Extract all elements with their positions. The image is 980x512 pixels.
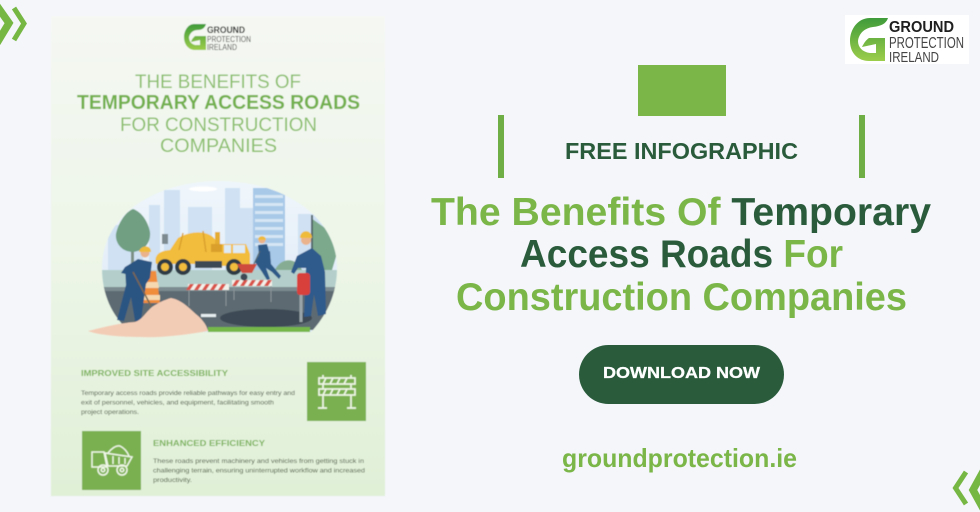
main headline [431, 191, 931, 319]
body text [81, 390, 295, 416]
asphalt patch [220, 309, 312, 327]
button: download now: DOWNLOAD NOW [603, 365, 760, 382]
logo: Ground Protection Ireland: GROUND [889, 19, 954, 36]
heading: ENHANCED EFFICIENCY [153, 438, 265, 448]
body text: exit of personnel, vehicles, and equipment, facilitating smooth [81, 400, 274, 406]
panel: infographic poster preview [51, 16, 385, 496]
poster title: COMPANIES [160, 135, 277, 157]
shovel worker [117, 246, 158, 321]
poster title: TEMPORARY ACCESS ROADS [77, 92, 360, 114]
body text: project operations. [81, 409, 139, 416]
heading: IMPROVED SITE ACCESSIBILITY [81, 368, 228, 378]
lane mark [201, 314, 216, 317]
poster title: THE BENEFITS OF [135, 71, 301, 93]
barriers [186, 280, 272, 306]
label: free infographic: FREE INFOGRAPHIC [565, 138, 798, 164]
jackhammer worker [291, 231, 326, 322]
poster logo: PROTECTION [207, 34, 251, 44]
decorative green block [638, 65, 726, 116]
poster logo [184, 24, 251, 52]
icon: dump truck [82, 431, 141, 490]
label: free infographic [498, 115, 865, 178]
body text: challenging terrain, ensuring uninterrupted workflow and increased [153, 468, 365, 474]
poster title [77, 71, 360, 157]
poster title: FOR CONSTRUCTION [120, 114, 317, 136]
sand pile [88, 298, 208, 337]
poster background [51, 16, 385, 496]
wheelbarrow worker [237, 236, 281, 280]
body text: These roads prevent machinery and vehicles from getting stuck in [153, 458, 364, 465]
sidewalk [100, 270, 340, 288]
poster logo: IRELAND [207, 42, 237, 52]
poster logo: GROUND [207, 25, 245, 35]
trees [130, 251, 134, 264]
logo: Ground Protection Ireland: IRELAND [889, 50, 939, 66]
button: download now [579, 345, 784, 404]
traffic cone [139, 271, 160, 303]
icon: top-left chevrons [0, 6, 24, 43]
grass strip [208, 327, 310, 333]
concrete mixer truck [156, 231, 250, 275]
main headline: Construction Companies [456, 276, 907, 319]
website url: groundprotection.ie [562, 443, 797, 473]
illustration: road construction scene [88, 180, 340, 337]
icon: bottom-right chevrons [956, 470, 980, 510]
buildings [108, 188, 330, 270]
cloud [189, 186, 217, 192]
section: improved site accessibility [81, 362, 366, 421]
body text: Temporary access roads provide reliable pathways for easy entry and [81, 390, 295, 397]
body text: productivity. [153, 477, 192, 484]
section: enhanced efficiency [82, 431, 365, 490]
main headline: The Benefits Of Temporary [431, 191, 931, 234]
icon: road barrier [307, 362, 366, 421]
main headline: Access Roads For [520, 233, 843, 276]
body text [153, 458, 365, 484]
logo: Ground Protection Ireland [845, 15, 969, 66]
road [100, 290, 340, 330]
